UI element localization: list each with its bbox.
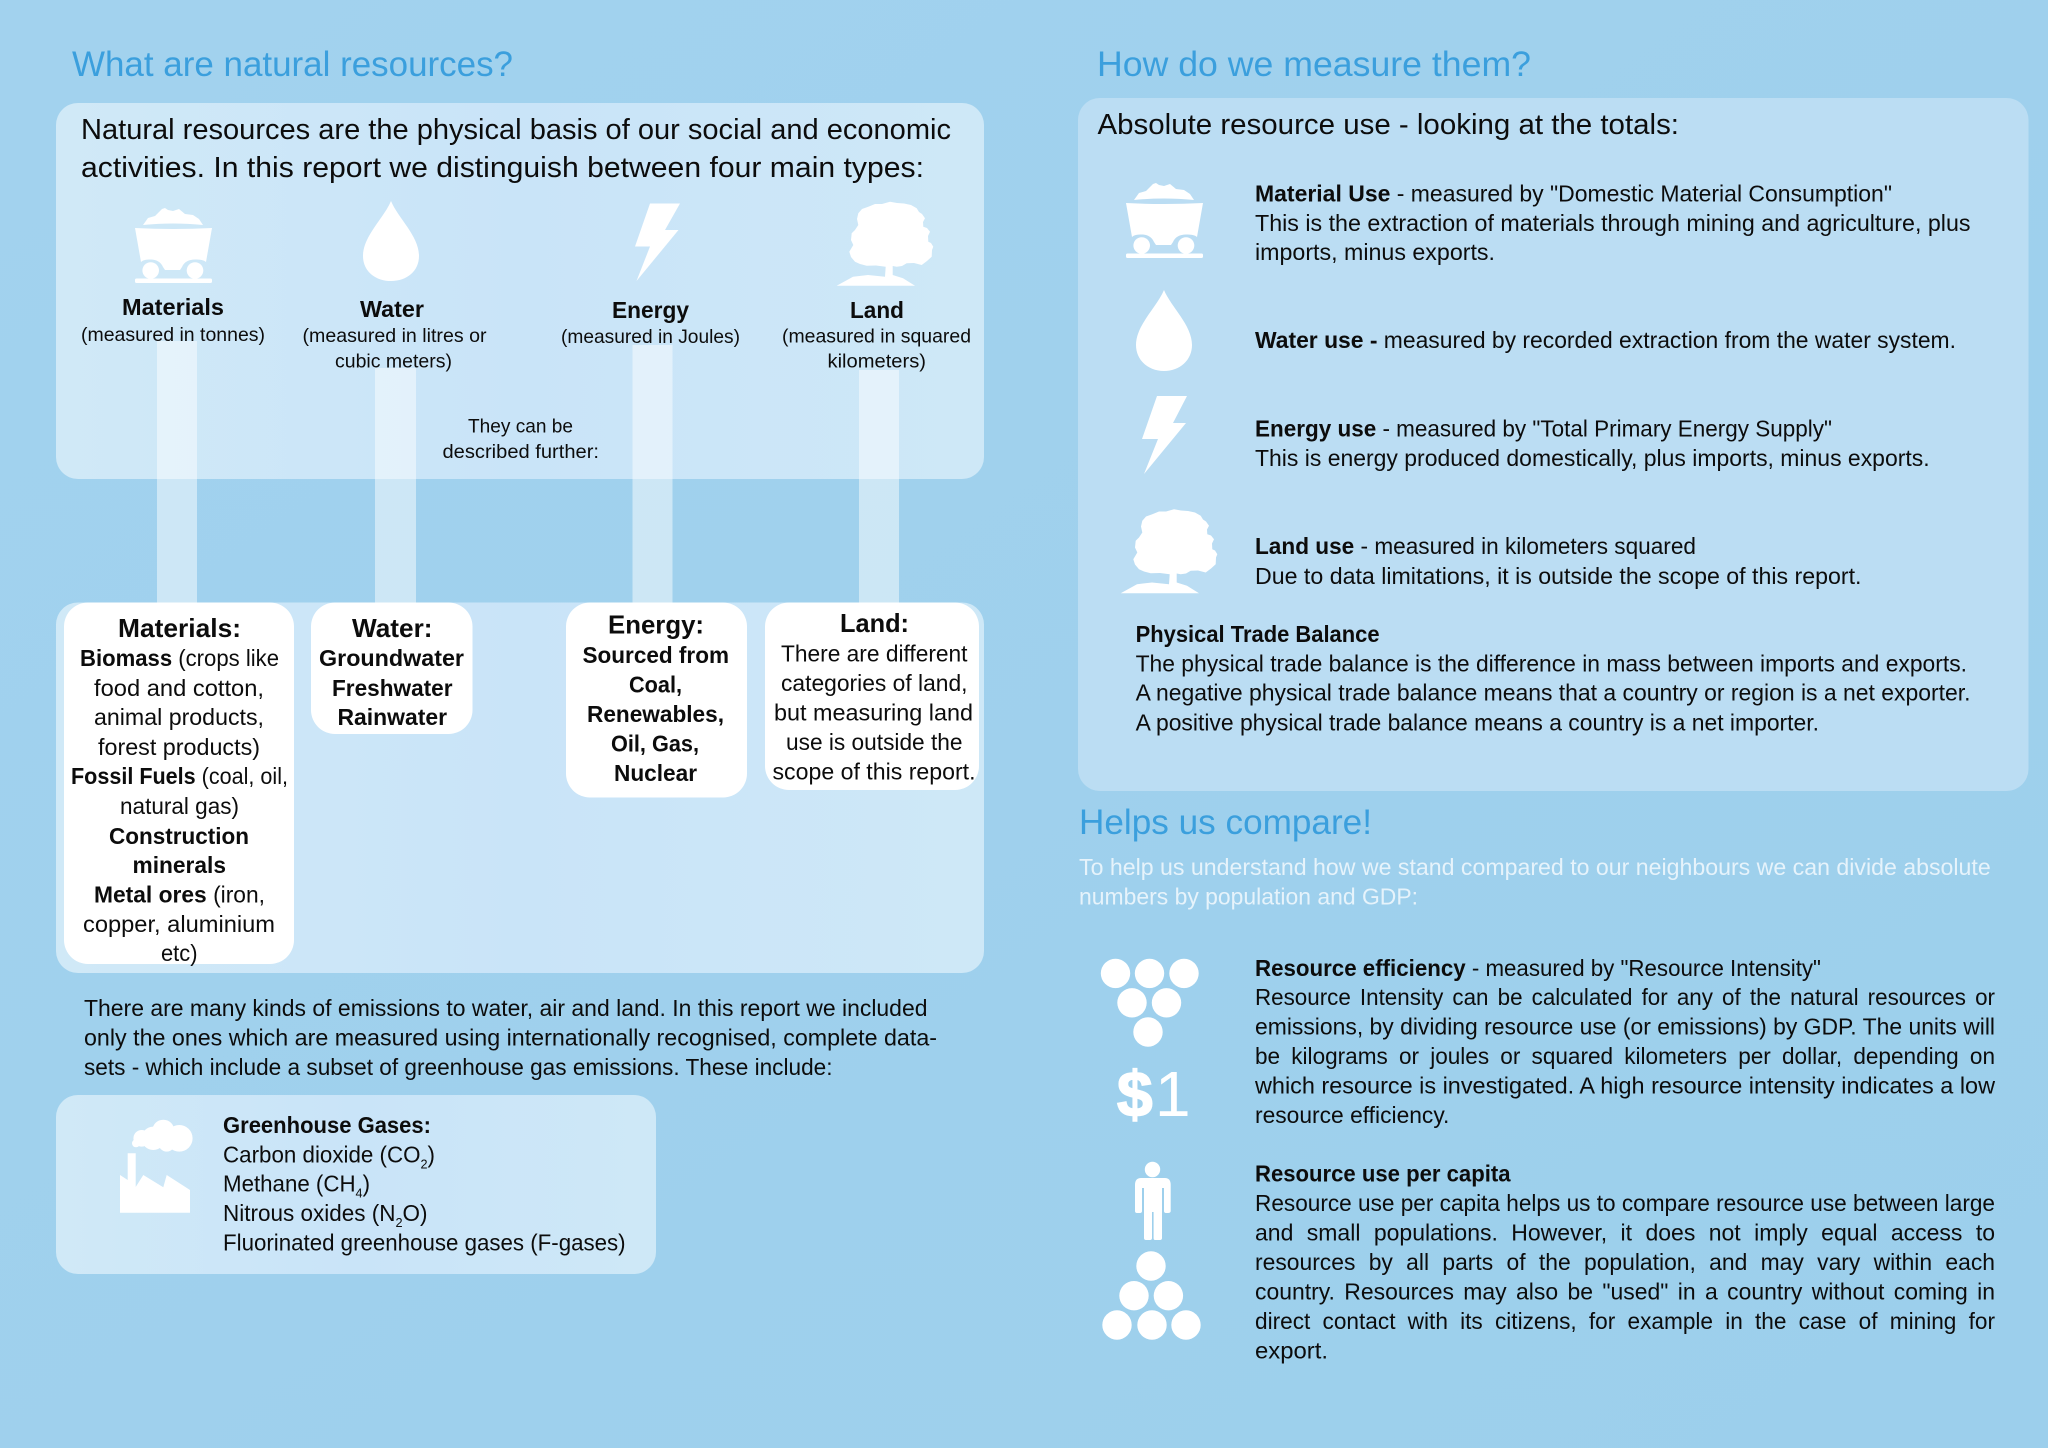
card: materials: Materials: (118, 613, 241, 643)
label: energy: Energy (612, 297, 689, 323)
icon: person (1135, 1162, 1171, 1240)
list of gases: 4 (356, 1186, 363, 1200)
icon: factory (120, 1120, 193, 1213)
card: energy: Nuclear (614, 760, 697, 786)
text: physical trade balance (1136, 621, 1970, 735)
card: land: use is outside the (786, 729, 962, 755)
card: land: Land: (840, 608, 909, 638)
label: land: (measured in squared (782, 326, 971, 348)
card: materials: natural gas) (120, 793, 239, 819)
list of gases: O) (403, 1200, 428, 1226)
panel: further descriptions (56, 602, 984, 973)
list of gases: Greenhouse Gases: (223, 1112, 431, 1138)
text: resource use per capita: Resource use per capita helps us to compare resource use between large (1255, 1190, 1995, 1216)
text: water use: Water use - measured by recorded extraction from the water system. (1255, 327, 1956, 353)
text: compare intro: numbers by population and GDP: (1079, 884, 1418, 910)
label: water: cubic meters) (335, 350, 452, 372)
list of gases: ) (363, 1170, 370, 1196)
label: land (782, 297, 971, 372)
label: energy: (measured in Joules) (561, 326, 740, 348)
card: water: Groundwater (319, 645, 464, 671)
card: land: categories of land, (781, 670, 968, 696)
text: physical trade balance: A negative physical trade balance means that a country or region is a net exporter. (1136, 680, 1970, 706)
card: materials: animal products, (94, 704, 264, 730)
card: water (311, 602, 472, 734)
icon: mine cart (135, 208, 212, 283)
label: materials: (measured in tonnes) (81, 324, 265, 346)
card: land: There are different (781, 640, 968, 666)
text: resource efficiency: emissions, by dividing resource use (or emissions) by GDP. The units will (1255, 1014, 1995, 1040)
card: water: Rainwater (338, 704, 447, 730)
heading: what are natural resources: What are natural resources? (72, 45, 513, 84)
text: they can be described further: They can be (468, 416, 573, 438)
text: energy use: Energy use - measured by "Total Primary Energy Supply" (1255, 415, 1832, 441)
text: resource efficiency: Resource efficiency - measured by "Resource Intensity" (1255, 955, 1821, 981)
panel: four main resource types (56, 103, 984, 479)
text: emissions explanation: There are many kinds of emissions to water, air and land. In this report we included (84, 995, 928, 1021)
card: land: scope of this report. (772, 758, 976, 784)
list of gases: Methane (CH (223, 1170, 360, 1196)
card: water: Freshwater (332, 675, 453, 701)
text: emissions explanation: sets - which include a subset of greenhouse gas emissions. These include: (84, 1054, 832, 1080)
text: resource efficiency: Resource Intensity can be calculated for any of the natural resources or (1255, 984, 1995, 1010)
card: materials (64, 602, 294, 966)
text: resource use per capita: country. Resources may also be "used" in a country without coming in (1255, 1278, 1995, 1304)
text: land use: Due to data limitations, it is outside the scope of this report. (1255, 563, 1862, 589)
icon: lightning bolt (1142, 396, 1187, 474)
label: materials (81, 294, 265, 346)
card: materials: Metal ores (iron, (94, 882, 265, 908)
list of gases: Fluorinated greenhouse gases (F-gases) (223, 1230, 626, 1256)
text: material use: imports, minus exports. (1255, 239, 1495, 265)
card: materials: Biomass (crops like (80, 645, 279, 671)
intro text: Natural resources are the physical basis of our social and economic (81, 114, 951, 146)
connector columns linking types to descriptions (157, 341, 899, 604)
text: energy use (1255, 415, 1930, 471)
card: materials: Fossil Fuels (coal, oil, (71, 763, 288, 789)
heading: helps us compare: Helps us compare! (1079, 803, 1372, 842)
heading: how do we measure them: How do we measure them? (1097, 45, 1531, 84)
icon: mine cart (1126, 183, 1203, 258)
panel: absolute resource use (1078, 98, 2028, 791)
text: land use: Land use - measured in kilometers squared (1255, 533, 1696, 559)
text: physical trade balance: The physical trade balance is the difference in mass between imports and exports. (1136, 650, 1967, 676)
text: resource use per capita: Resource use per capita (1255, 1160, 1511, 1186)
text: resource use per capita: resources by all parts of the population, and may vary within each (1255, 1249, 1995, 1275)
icon: resource circles per dollar (1101, 959, 1199, 1047)
card: energy: Sourced from (582, 642, 729, 668)
card: land: but measuring land (774, 700, 973, 726)
list of gases: Nitrous oxides (N (223, 1200, 399, 1226)
list of gases (223, 1112, 626, 1256)
list of gases: Carbon dioxide (CO (223, 1142, 426, 1168)
text: resource use per capita: export. (1255, 1338, 1328, 1364)
text: resource use per capita (1255, 1160, 1995, 1364)
icon: one dollar: $ (1117, 1058, 1153, 1130)
card: materials: food and cotton, (94, 675, 264, 701)
text: material use: This is the extraction of materials through mining and agriculture, plus (1255, 210, 1970, 236)
label: materials: Materials (122, 294, 224, 320)
card: water: Water: (352, 613, 432, 643)
icon: one dollar: 1 (1155, 1058, 1191, 1130)
text: they can be described further (442, 416, 599, 463)
icon: water drop (363, 201, 419, 281)
icon: tree (837, 202, 933, 286)
text: emissions explanation (84, 995, 937, 1080)
label: water: Water (360, 296, 424, 322)
icon: tree (1121, 509, 1217, 593)
panel: greenhouse gases (56, 1095, 656, 1274)
card: energy: Energy: (608, 610, 704, 640)
text: physical trade balance: A positive physical trade balance means a country is a net importer. (1136, 709, 1819, 735)
label: water: (measured in litres or (302, 325, 487, 347)
card: materials: forest products) (98, 734, 260, 760)
card: energy: Oil, Gas, (611, 730, 699, 756)
text: land use (1255, 533, 1862, 589)
text: material use: Material Use - measured by "Domestic Material Consumption" (1255, 181, 1892, 207)
text: resource efficiency: be kilograms or joules or squared kilometers per dollar, depending on (1255, 1043, 1995, 1069)
text: resource use per capita: and small populations. However, it does not imply equal access to (1255, 1220, 1995, 1246)
card: energy: Coal, (629, 672, 682, 698)
intro text: activities. In this report we distinguish between four main types: (81, 152, 924, 184)
label: energy (561, 297, 740, 348)
label: land: Land (850, 297, 904, 323)
card: land (765, 602, 979, 790)
subheading: absolute resource use: Absolute resource use - looking at the totals: (1098, 109, 1679, 141)
card: materials: copper, aluminium (83, 911, 275, 937)
text: resource efficiency: which resource is investigated. A high resource intensity indicates a low (1254, 1072, 1995, 1098)
icon: one dollar (1117, 1058, 1191, 1130)
text: physical trade balance: Physical Trade Balance (1136, 621, 1380, 647)
icon: population circles (1102, 1251, 1201, 1340)
text: material use (1255, 181, 1970, 265)
text: energy use: This is energy produced domestically, plus imports, minus exports. (1255, 445, 1930, 471)
card: energy: Renewables, (587, 701, 724, 727)
text: compare intro (1079, 854, 1991, 910)
text: compare intro: To help us understand how we stand compared to our neighbours we can divide absolute (1079, 854, 1991, 880)
text: they can be described further: described further: (442, 441, 599, 463)
label: land: kilometers) (828, 350, 926, 372)
icon: water drop (1136, 290, 1192, 371)
icon: lightning bolt (635, 204, 680, 281)
text: emissions explanation: only the ones which are measured using internationally recognised, complete data- (84, 1024, 937, 1050)
text: resource efficiency (1254, 955, 1995, 1128)
text: resource use per capita: direct contact with its citizens, for example in the case of mining for (1255, 1308, 1995, 1334)
card: materials: minerals (132, 852, 226, 878)
text: resource efficiency: resource efficiency. (1255, 1102, 1449, 1128)
list of gases: ) (428, 1142, 435, 1168)
label: water (302, 296, 487, 372)
card: energy (566, 602, 747, 798)
card: materials: etc) (161, 940, 198, 966)
list of gases: 2 (421, 1156, 428, 1172)
intro text (81, 114, 951, 184)
list of gases: 2 (395, 1215, 403, 1230)
card: materials: Construction (109, 823, 249, 849)
